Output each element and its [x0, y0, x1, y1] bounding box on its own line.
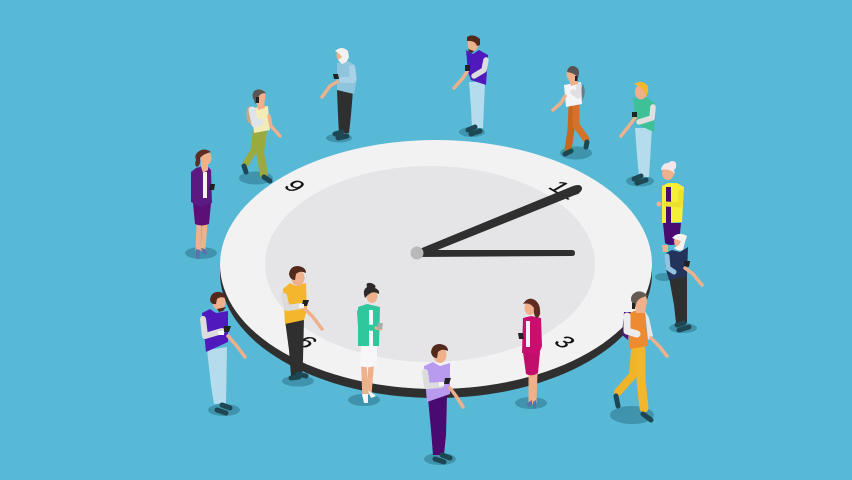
clock	[220, 140, 652, 398]
hour hand	[417, 250, 575, 257]
person: old man in navy vest	[655, 234, 702, 333]
inner dial	[265, 166, 595, 362]
numeral 12: 12	[543, 177, 587, 203]
person: older woman in yellow jacket	[656, 161, 684, 252]
person: walking man in yellow trousers	[610, 291, 667, 424]
person: blond man in green vest	[621, 82, 655, 186]
person: woman in purple suit	[185, 150, 217, 259]
numeral 9: 9	[278, 176, 312, 196]
person: bearded man in purple vest, top	[454, 35, 488, 137]
numeral 3: 3	[548, 332, 582, 352]
minute hand	[417, 185, 582, 257]
person: man in yellow vest	[282, 266, 322, 386]
person: woman in teal jacket	[348, 283, 383, 406]
numeral 6: 6	[290, 332, 324, 352]
person: walking woman in olive trousers	[239, 89, 280, 184]
clock base edge	[220, 148, 652, 398]
person: man in lavender vest	[424, 344, 463, 465]
pivot	[410, 246, 424, 260]
person: bearded man in purple vest, lower left	[202, 292, 245, 416]
clock face	[220, 140, 652, 389]
person: woman in magenta suit	[515, 299, 547, 409]
person: walking woman in orange trousers	[553, 66, 592, 160]
person: old man in light blue shirt	[322, 48, 357, 142]
